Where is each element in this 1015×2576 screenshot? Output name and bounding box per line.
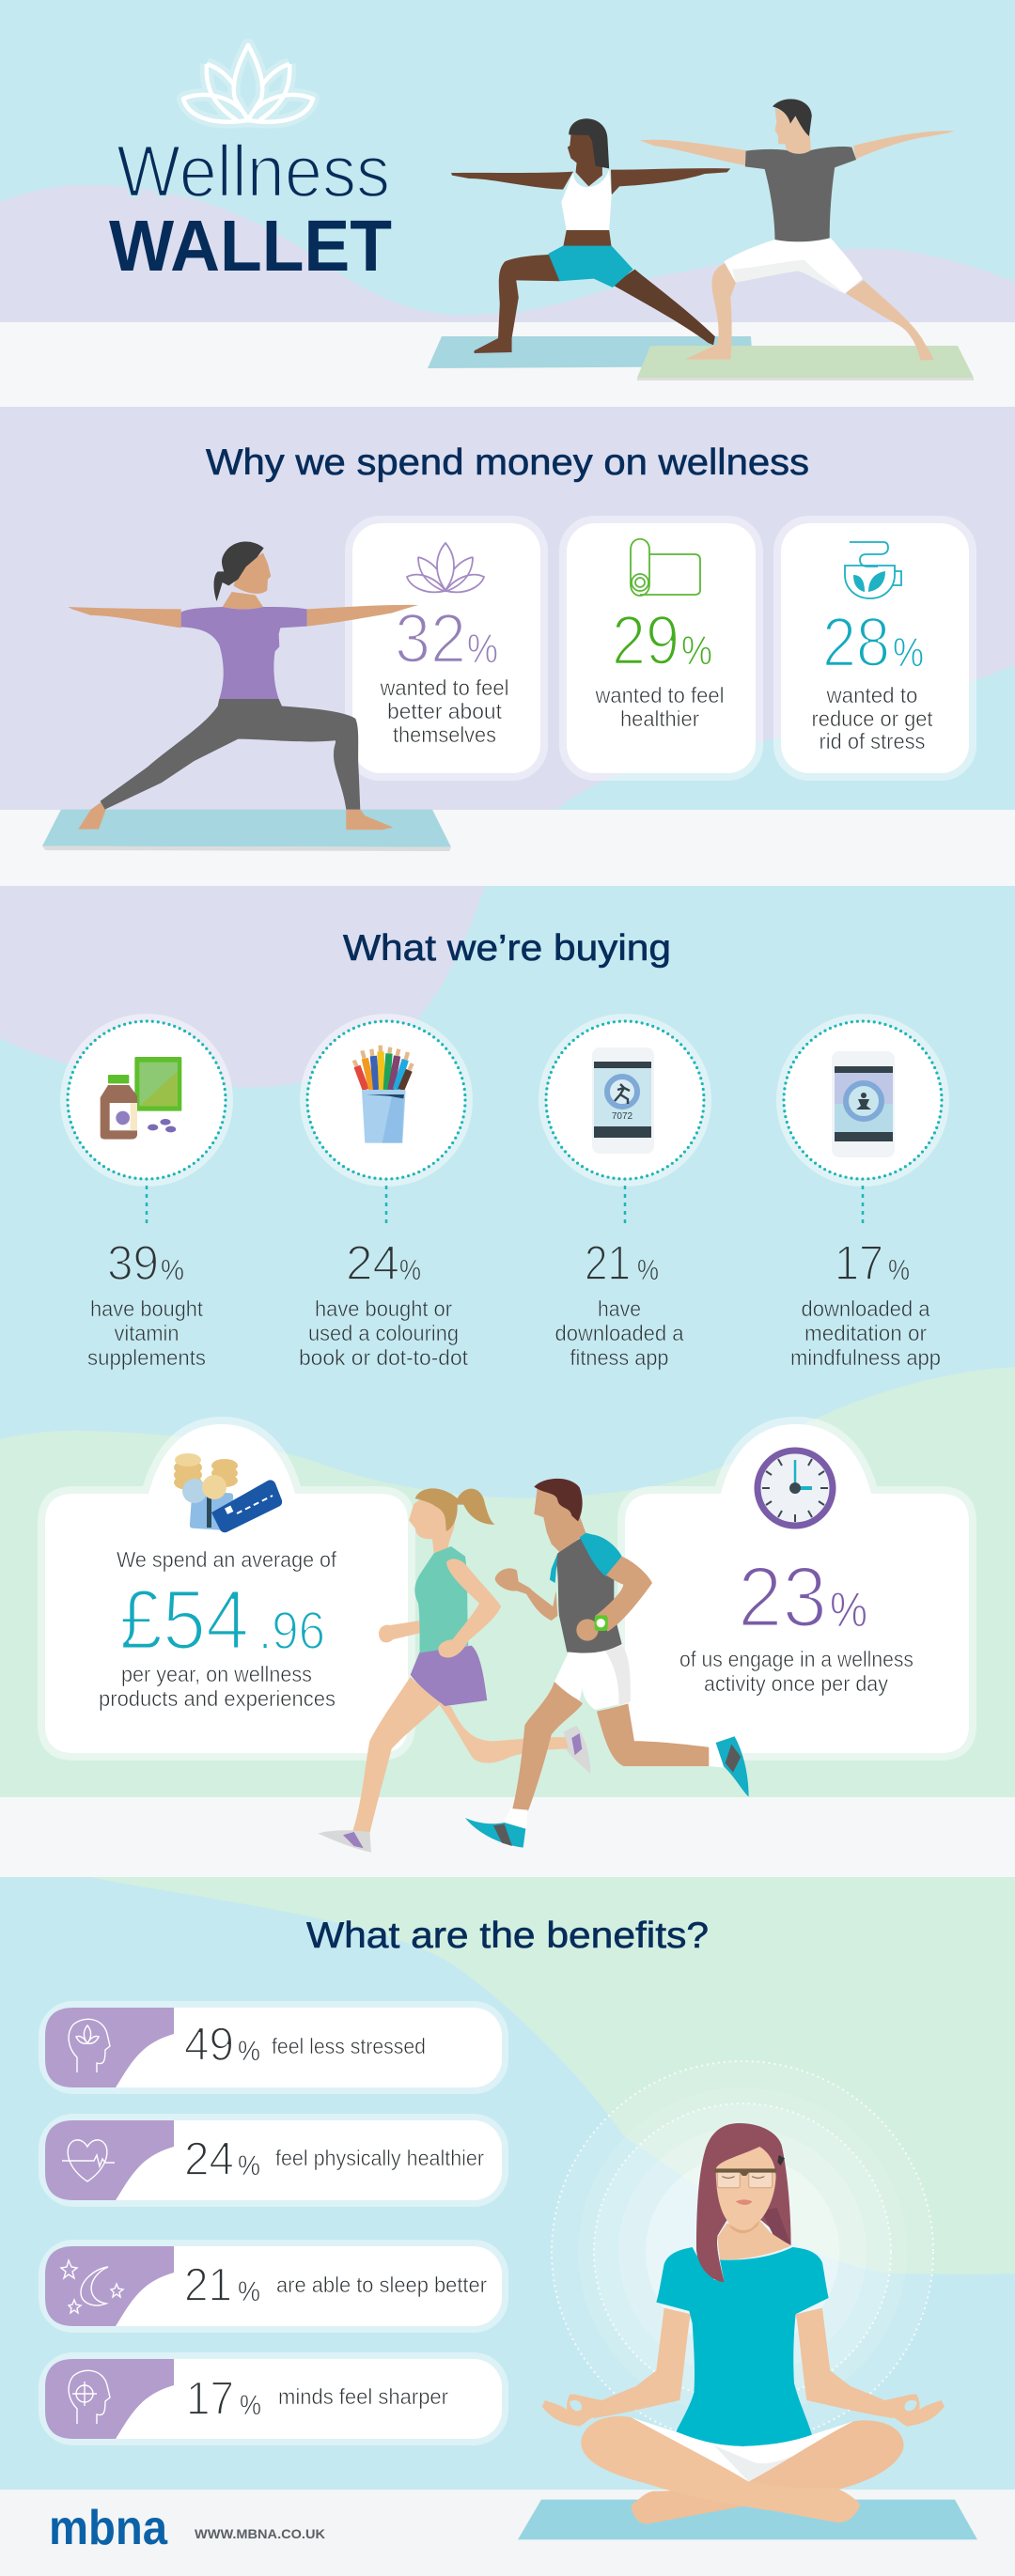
card: daily activity: activity once per day — [704, 1671, 888, 1696]
item: colouring book: 24 — [346, 1236, 399, 1291]
benefit bar: sleep better: 21 — [184, 2258, 232, 2311]
card: average spend: £54 — [119, 1574, 249, 1668]
item: colouring book: book or dot-to-dot — [299, 1345, 469, 1370]
card: daily activity: % — [830, 1583, 867, 1637]
item: vitamin supplements: vitamin — [115, 1321, 179, 1345]
item: fitness app: fitness app — [570, 1345, 669, 1370]
logo: mbna: mbna — [49, 2501, 168, 2555]
item: vitamin supplements — [60, 1014, 233, 1370]
illustration: yoga couple on mats — [428, 99, 974, 380]
item: meditation app — [776, 1014, 949, 1370]
icon: coins and cards — [174, 1453, 282, 1532]
item: vitamin supplements: have bought — [90, 1296, 204, 1321]
item: colouring book: used a colouring — [308, 1321, 459, 1345]
benefit bar: sleep better — [45, 2246, 502, 2326]
card: daily activity: 23 — [738, 1550, 827, 1645]
benefit bar: sleep better: are able to sleep better — [276, 2273, 487, 2297]
item: fitness app: 7072 — [612, 1111, 633, 1122]
heading: what are the benefits: What are the benefits? — [306, 1916, 709, 1956]
runner: woman — [318, 1488, 590, 1853]
benefit bar: less stressed — [45, 2008, 502, 2087]
item: meditation app: meditation or — [804, 1321, 927, 1345]
title: WALLET — [109, 206, 392, 287]
heading: why we spend money on wellness: Why we spend money on wellness — [206, 442, 809, 483]
card: 32%: wanted to feel — [380, 675, 509, 700]
illustration: runners — [318, 1479, 749, 1853]
item: meditation app: % — [888, 1253, 910, 1286]
runner: man — [465, 1479, 749, 1848]
item: meditation app: mindfulness app — [790, 1345, 941, 1370]
card: 29%: healthier — [620, 706, 699, 731]
card: 32%: 32 — [395, 599, 466, 677]
benefit bar: minds sharper: 17 — [186, 2372, 234, 2425]
card: 28%: 28 — [822, 603, 890, 681]
benefit bar: physically healthier: 24 — [184, 2133, 234, 2185]
illustration: meditating woman on mat — [518, 2123, 977, 2539]
item: fitness app: % — [637, 1253, 659, 1286]
card: daily activity — [625, 1424, 969, 1753]
card: 28% — [781, 523, 969, 773]
card: average spend: .96 — [258, 1601, 325, 1661]
item: colouring book: % — [399, 1253, 421, 1286]
benefit bar: physically healthier: % — [238, 2150, 260, 2181]
card: 28%: % — [893, 629, 924, 675]
item: vitamin supplements: 39 — [107, 1236, 159, 1291]
item: fitness app: downloaded a — [554, 1321, 684, 1345]
card: 28%: reduce or get — [812, 706, 933, 731]
card: 28%: rid of stress — [820, 729, 925, 753]
card: 29%: 29 — [612, 601, 679, 679]
panel: benefits background — [0, 1877, 1015, 2576]
title — [109, 130, 392, 287]
card: daily activity: of us engage in a wellness — [679, 1647, 914, 1671]
title: Wellness — [117, 130, 390, 212]
benefit bar: less stressed: feel less stressed — [272, 2034, 426, 2058]
icon: white lotus — [183, 45, 313, 122]
benefit bar: minds sharper: minds feel sharper — [278, 2384, 448, 2409]
card: average spend — [45, 1424, 408, 1753]
icon: clock — [757, 1451, 833, 1526]
benefit bar: minds sharper — [45, 2359, 502, 2439]
benefit bar: less stressed: 49 — [184, 2018, 234, 2071]
benefit bar: minds sharper: % — [240, 2390, 261, 2421]
item: meditation app: 17 — [835, 1236, 883, 1291]
card: 32%: % — [467, 626, 498, 672]
illustration: woman in warrior pose on mat — [42, 542, 451, 851]
benefit bar: less stressed: % — [238, 2036, 260, 2067]
item: fitness app: 21 — [585, 1236, 631, 1291]
item: colouring book — [299, 1014, 473, 1370]
benefit bar: sleep better: % — [238, 2276, 260, 2307]
panel: header background — [0, 0, 1015, 407]
item: vitamin supplements: supplements — [87, 1345, 206, 1370]
card: 29% — [567, 523, 756, 773]
benefit bar: physically healthier — [45, 2120, 502, 2200]
card: 32% — [352, 523, 540, 773]
stat cards: reasons — [352, 523, 969, 773]
item: vitamin supplements: % — [161, 1253, 184, 1286]
heading: what we're buying: What we’re buying — [343, 928, 671, 969]
item: fitness app: have — [598, 1296, 641, 1321]
illustration: calm aura rings — [552, 2061, 933, 2443]
card: 28%: wanted to — [826, 683, 917, 707]
panel: why we spend background — [0, 407, 1015, 886]
card: average spend: per year, on wellness — [121, 1662, 312, 1686]
card: average spend: We spend an average of — [117, 1547, 337, 1572]
item: fitness app — [539, 1014, 711, 1370]
footer url: WWW.MBNA.CO.UK — [195, 2526, 325, 2541]
panel: what we're buying background — [0, 886, 1015, 1877]
card: 29%: % — [681, 628, 712, 674]
card: average spend: products and experiences — [99, 1686, 336, 1711]
benefit bar: physically healthier: feel physically healthier — [275, 2146, 484, 2170]
card: 32%: better about — [387, 699, 503, 723]
item: meditation app: downloaded a — [801, 1296, 930, 1321]
card: 29%: wanted to feel — [595, 683, 724, 707]
card: 32%: themselves — [393, 722, 496, 747]
item: colouring book: have bought or — [315, 1296, 452, 1321]
